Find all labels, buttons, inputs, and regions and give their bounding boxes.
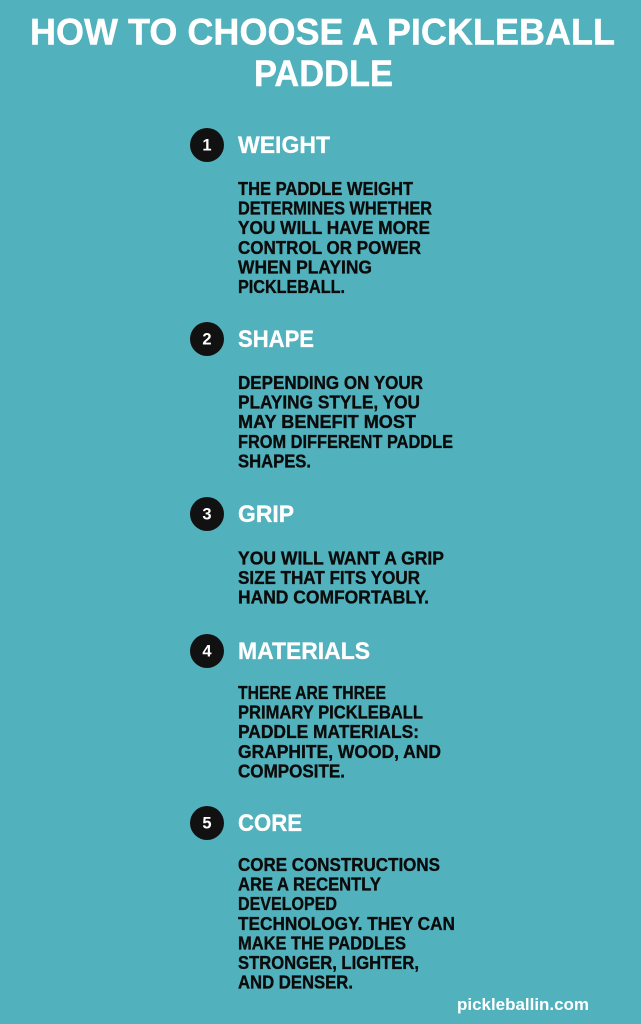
text block: grip — [238, 548, 444, 608]
icon: number 5 — [190, 806, 224, 840]
text block: materials: PADDLE MATERIALS: — [238, 722, 419, 742]
heading: materials: MATERIALS — [238, 638, 370, 665]
icon: number 3: 3 — [202, 506, 212, 524]
text block: core: STRONGER, LIGHTER, — [238, 953, 419, 973]
heading: shape: SHAPE — [238, 326, 314, 353]
panel: shape — [190, 322, 453, 471]
text block: core: AND DENSER. — [238, 973, 353, 993]
icon: number 1: 1 — [202, 136, 212, 154]
text block: materials: GRAPHITE, WOOD, AND — [238, 742, 441, 762]
text block: materials — [238, 683, 441, 781]
text block: weight: DETERMINES WHETHER — [238, 199, 432, 219]
panel: weight — [190, 128, 432, 297]
panel: core — [190, 806, 455, 993]
icon: number 5: 5 — [202, 814, 212, 832]
icon: number 3 — [190, 497, 224, 531]
text block: weight: WHEN PLAYING — [238, 257, 372, 277]
icon: number 2 — [190, 322, 224, 356]
text block: core: ARE A RECENTLY — [238, 875, 381, 895]
text block: shape: PLAYING STYLE, YOU — [238, 393, 420, 413]
icon: number 4: 4 — [202, 642, 212, 660]
text block: shape: FROM DIFFERENT PADDLE — [238, 432, 453, 452]
text block: core: CORE CONSTRUCTIONS — [238, 855, 440, 875]
text block: core: DEVELOPED — [238, 894, 337, 914]
text block: grip: YOU WILL WANT A GRIP — [238, 548, 444, 568]
text block: shape: MAY BENEFIT MOST — [238, 412, 416, 432]
text block: weight: PICKLEBALL. — [238, 277, 345, 297]
text block: weight: CONTROL OR POWER — [238, 238, 421, 258]
footer: website: pickleballin.com — [457, 996, 589, 1014]
heading: grip: GRIP — [238, 501, 294, 528]
text block: core: TECHNOLOGY. THEY CAN — [238, 914, 455, 934]
text block: grip: HAND COMFORTABLY. — [238, 588, 429, 608]
text block: shape — [238, 373, 453, 471]
text block: shape: DEPENDING ON YOUR — [238, 373, 423, 393]
icon: number 1 — [190, 128, 224, 162]
text block: materials: PRIMARY PICKLEBALL — [238, 703, 423, 723]
title: HOW TO CHOOSE A PICKLEBALL — [30, 10, 615, 52]
text block: grip: SIZE THAT FITS YOUR — [238, 568, 420, 588]
text block: shape: SHAPES. — [238, 451, 311, 471]
panel: materials — [190, 634, 441, 781]
title: PADDLE — [254, 52, 393, 94]
text block: weight: YOU WILL HAVE MORE — [238, 218, 430, 238]
text block: materials: THERE ARE THREE — [238, 683, 386, 703]
text block: core: MAKE THE PADDLES — [238, 933, 406, 953]
heading: core: CORE — [238, 810, 302, 837]
title — [30, 10, 615, 94]
text block: materials: COMPOSITE. — [238, 761, 345, 781]
heading: weight: WEIGHT — [238, 132, 330, 159]
text block: weight — [238, 179, 432, 297]
text block: weight: THE PADDLE WEIGHT — [238, 179, 413, 199]
icon: number 2: 2 — [202, 330, 212, 348]
icon: number 4 — [190, 634, 224, 668]
panel: grip — [190, 497, 444, 608]
text block: core — [238, 855, 455, 993]
